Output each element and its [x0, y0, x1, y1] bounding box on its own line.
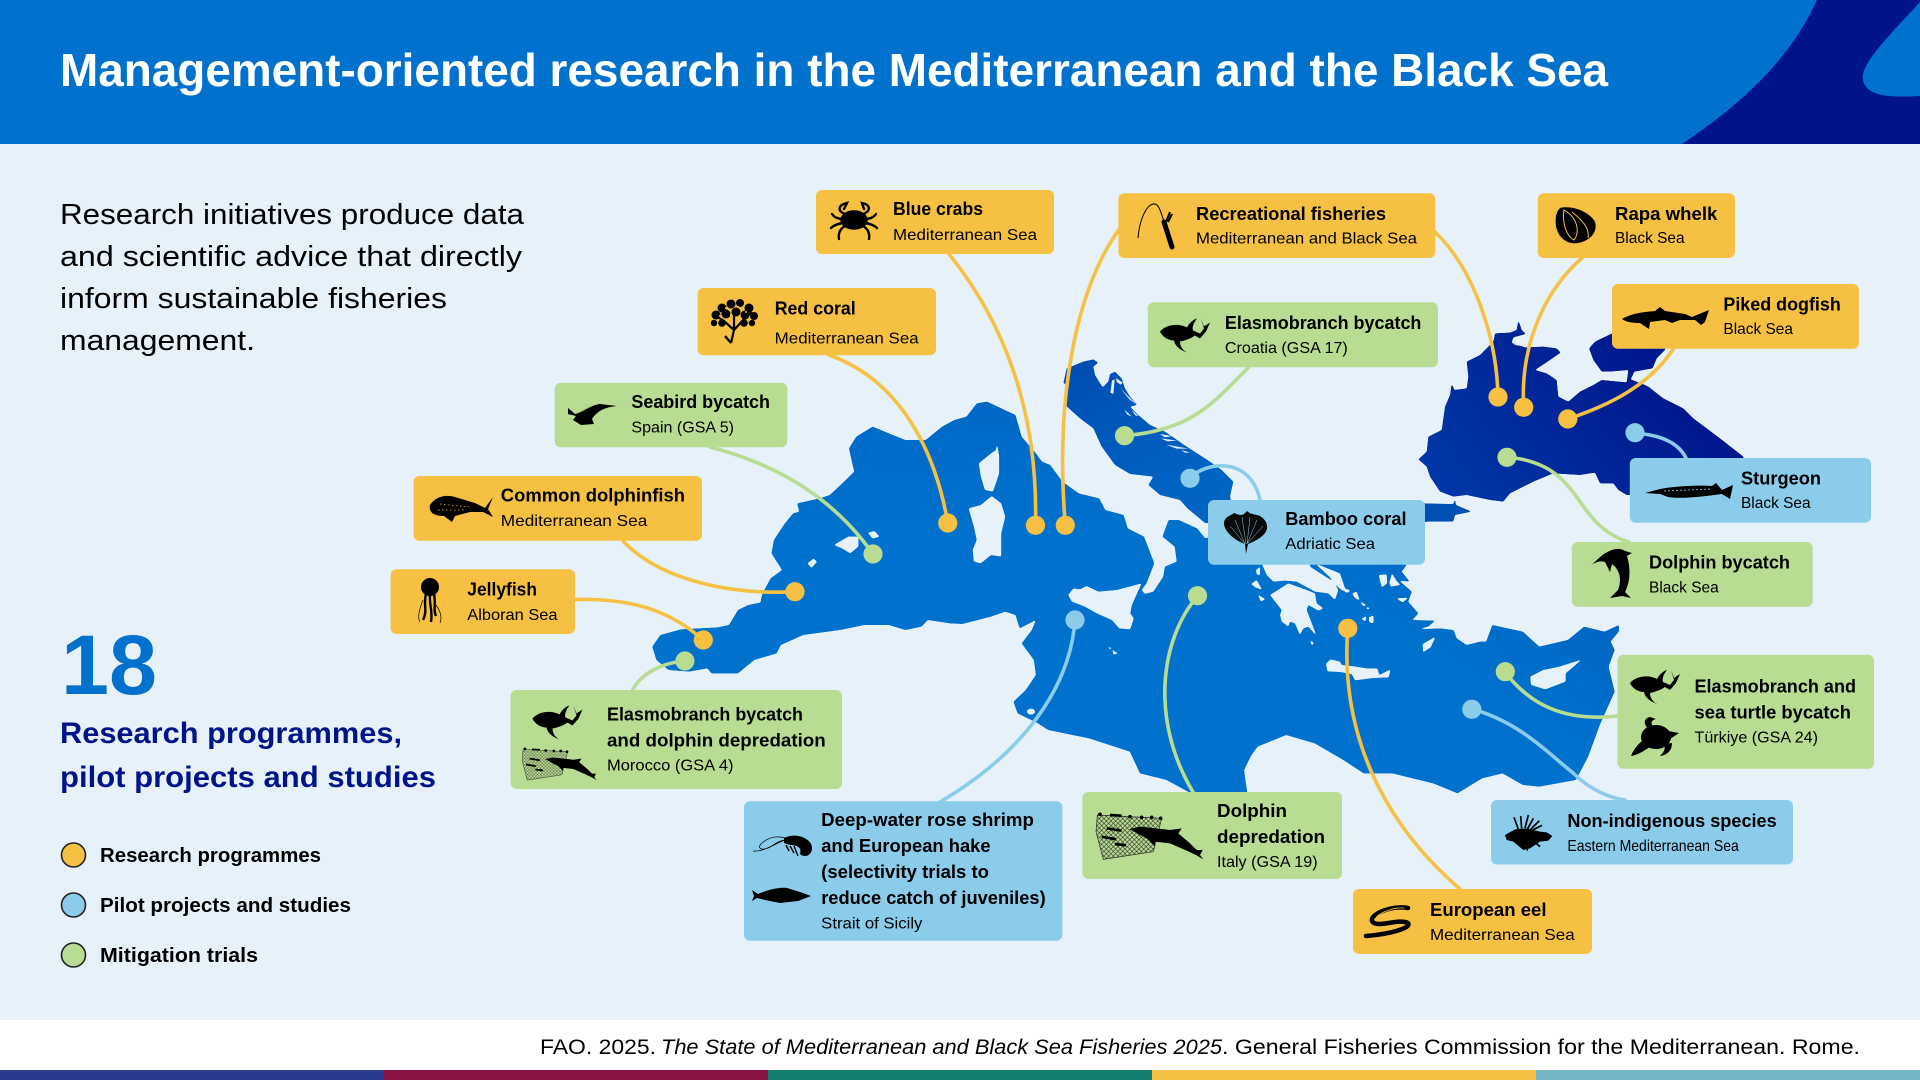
label: Elasmobranch bycatch: [1225, 312, 1421, 333]
footer with citation: . General Fisheries Commission for the Mediterranean. Rome.: [1222, 1035, 1860, 1059]
label: Italy (GSA 19): [1217, 854, 1318, 871]
icon: crab: [831, 203, 877, 239]
icon: red coral: [711, 299, 758, 343]
callout: Recreational fisheries: [1118, 193, 1435, 258]
label: Spain (GSA 5): [631, 420, 734, 437]
callout: Non-indigenous species: [1491, 800, 1793, 864]
label: Red coral: [775, 297, 856, 318]
label: Mediterranean Sea: [893, 227, 1037, 244]
label: and dolphin depredation: [607, 730, 826, 751]
callout: Jellyfish: [391, 569, 575, 634]
callout: Elasmobranch bycatch and dolphin depredation, Morocco: [511, 690, 842, 789]
label: Black Sea: [1723, 321, 1793, 338]
label: Blue crabs: [893, 198, 983, 219]
label: Elasmobranch and: [1694, 675, 1856, 696]
label: Mediterranean Sea: [775, 330, 919, 347]
label: reduce catch of juveniles): [821, 887, 1046, 908]
footer with citation: [0, 1020, 1920, 1070]
callout: Deep-water rose shrimp and European hake: [744, 801, 1062, 941]
intro text: Research initiatives produce data: [60, 199, 524, 231]
icon: sturgeon: [1645, 483, 1733, 499]
icon: sea turtle: [1631, 717, 1679, 756]
label: [631, 391, 770, 437]
label: Mediterranean Sea: [1430, 927, 1575, 944]
label: Non-indigenous species: [1567, 810, 1777, 831]
label: [1649, 551, 1790, 597]
icon: bamboo coral: [1224, 511, 1267, 554]
key figure: 18 research programmes: [60, 618, 436, 794]
icon: jellyfish: [419, 578, 441, 623]
key figure: 18 research programmes: Research programmes,: [60, 717, 402, 750]
label: (selectivity trials to: [821, 861, 989, 882]
label: Dolphin: [1217, 800, 1287, 821]
location dots: [675, 387, 1645, 719]
label: Bamboo coral: [1285, 508, 1406, 529]
label: Dolphin bycatch: [1649, 551, 1790, 572]
icon: rapa whelk: [1556, 207, 1596, 243]
callout: Rapa whelk: [1538, 193, 1735, 258]
label: [1694, 675, 1856, 747]
label: Black Sea: [1615, 230, 1685, 247]
callout: Elasmobranch and sea turtle bycatch, Türkiye: [1618, 655, 1874, 769]
icon: eel: [1366, 907, 1408, 936]
callout: Red coral: [698, 288, 936, 355]
callout: Common dolphinfish: [414, 476, 702, 541]
label: Strait of Sicily: [821, 915, 922, 932]
label: Black Sea: [1649, 580, 1719, 597]
callout: European eel: [1353, 889, 1592, 954]
icon: shrimp: [753, 836, 812, 856]
label: Eastern Mediterranean Sea: [1567, 838, 1739, 855]
footer with citation: The State of Mediterranean and Black Sea Fisheries 2025: [661, 1035, 1223, 1059]
label: [467, 579, 558, 624]
label: [775, 297, 919, 347]
callout: Piked dogfish: [1612, 284, 1859, 349]
icon: lionfish: [1505, 815, 1552, 851]
label: Morocco (GSA 4): [607, 758, 734, 775]
label: Common dolphinfish: [501, 485, 685, 506]
connector lines: [575, 228, 1686, 889]
label: Sturgeon: [1741, 467, 1821, 488]
label: [1741, 467, 1821, 512]
callout: Blue crabs: [816, 190, 1054, 254]
callout: Sturgeon: [1630, 458, 1871, 523]
label: Black Sea: [1741, 495, 1811, 512]
map: Mediterranean and Black Sea: [652, 320, 1743, 793]
label: [1430, 899, 1575, 944]
icon: dolphinfish: [430, 496, 493, 522]
label: Recreational fisheries: [1196, 203, 1386, 224]
icon: hake: [752, 888, 811, 903]
header banner: [0, 0, 1920, 144]
label: Adriatic Sea: [1285, 536, 1375, 553]
intro text: [60, 199, 524, 357]
label: European eel: [1430, 899, 1546, 920]
intro text: and scientific advice that directly: [60, 241, 523, 273]
icon: leaping dolphin: [1589, 549, 1632, 598]
label: Piked dogfish: [1723, 294, 1841, 315]
label: Elasmobranch bycatch: [607, 704, 803, 725]
icon: dolphin and net: [522, 748, 597, 780]
label: [1723, 294, 1841, 338]
label: Mediterranean Sea: [501, 513, 647, 530]
label: Rapa whelk: [1615, 203, 1718, 224]
label: Croatia (GSA 17): [1225, 340, 1348, 357]
icon: fishing rod: [1138, 204, 1172, 247]
legend: Research programmes: [100, 844, 321, 867]
callout: Dolphin depredation, Italy: [1082, 792, 1342, 879]
callout: Bamboo coral: [1208, 500, 1425, 565]
key figure: 18 research programmes: 18: [61, 618, 157, 712]
label: [501, 485, 685, 530]
icon: dogfish: [1622, 307, 1709, 329]
key figure: 18 research programmes: pilot projects and studies: [60, 761, 436, 794]
intro text: management.: [60, 325, 255, 357]
label: Türkiye (GSA 24): [1694, 730, 1818, 747]
legend: [62, 843, 351, 967]
label: Alboran Sea: [467, 607, 558, 624]
intro text: inform sustainable fisheries: [60, 283, 447, 315]
label: [893, 198, 1037, 244]
legend: Mitigation trials: [100, 944, 258, 967]
callout: Elasmobranch bycatch, Croatia: [1148, 302, 1438, 367]
icon: shark: [1630, 670, 1680, 704]
label: sea turtle bycatch: [1694, 701, 1851, 722]
title: Management-oriented research in the Mediterranean and the Black Sea: [60, 44, 1608, 96]
label: Jellyfish: [467, 579, 537, 600]
label: [1217, 800, 1325, 871]
label: [821, 809, 1046, 932]
icon: seabird: [568, 404, 617, 425]
label: Deep-water rose shrimp: [821, 809, 1034, 830]
callout: Dolphin bycatch: [1572, 542, 1813, 607]
label: Mediterranean and Black Sea: [1196, 230, 1417, 247]
label: and European hake: [821, 835, 991, 856]
label: [607, 704, 826, 775]
label: [1285, 508, 1406, 553]
label: [1225, 312, 1421, 357]
icon: shark: [532, 706, 582, 740]
callout: Seabird bycatch: [555, 383, 787, 447]
label: [1615, 203, 1718, 247]
label: depredation: [1217, 826, 1325, 847]
footer colour bar: [0, 1070, 1920, 1080]
label: [1196, 203, 1417, 247]
label: Seabird bycatch: [631, 391, 770, 412]
icon: shark: [1160, 318, 1210, 352]
legend: Pilot projects and studies: [100, 894, 351, 917]
label: [1567, 810, 1777, 855]
footer with citation: FAO. 2025.: [540, 1035, 656, 1059]
icon: dolphin and net: [1096, 812, 1203, 859]
